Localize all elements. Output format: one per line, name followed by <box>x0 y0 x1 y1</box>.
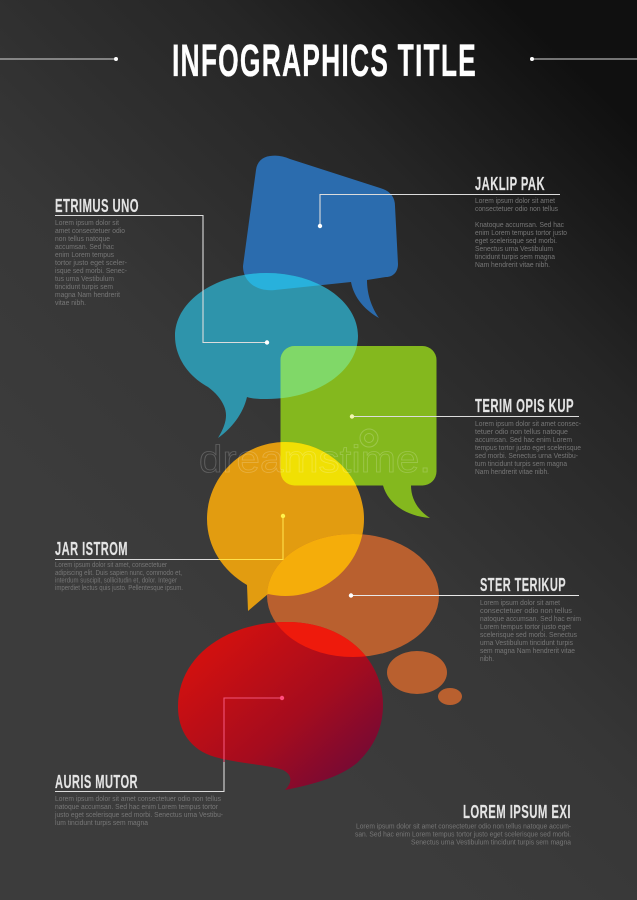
overlap: green and orange <box>280 442 356 486</box>
text: auris mutor: justo eget scelerisque sed morbi. Senectus urna Vestibu- <box>54 812 224 819</box>
connector: terim opis kup <box>350 414 579 419</box>
text: jaklip pak: tincidunt turpis sem magna <box>475 254 555 261</box>
text: etrimus uno: enim Lorem tempus <box>55 252 114 259</box>
bubble: green <box>280 346 436 518</box>
text: auris mutor: Lorem ipsum dolor sit amet consectetuer odio non tellus <box>55 796 221 803</box>
text: jar istrom: imperdiet lectus quis justo. Pellentesque ipsum. <box>55 585 183 592</box>
text: auris mutor <box>54 796 224 827</box>
heading: auris mutor: AURIS MUTOR <box>55 772 138 792</box>
text: lorem ipsum exi: Senectus urna Vestibulum tincidunt turpis sem magna <box>411 840 571 846</box>
text: lorem ipsum exi <box>355 824 572 846</box>
text: jar istrom: adipiscing elit. Duis sapien nunc, commodo et, <box>55 570 182 577</box>
connector: auris mutor <box>55 696 284 792</box>
text: terim opis kup <box>475 421 582 476</box>
text: jar istrom <box>55 562 183 592</box>
text: etrimus uno: tus urna Vestibulum <box>55 276 114 283</box>
text: etrimus uno: tincidunt turpis sem <box>55 284 113 291</box>
text: etrimus uno: Lorem ipsum dolor sit <box>55 220 119 227</box>
text: etrimus uno: accumsan. Sed hac <box>55 244 114 251</box>
text: jar istrom: interdum suscipit, sollicitudin et, dolor. Integer <box>55 578 178 584</box>
text: jaklip pak <box>475 198 567 269</box>
text: etrimus uno: isque sed morbi. Senec- <box>55 268 128 275</box>
heading: ster terikup: STER TERIKUP <box>480 575 566 595</box>
bubble: orange <box>207 442 364 611</box>
text: etrimus uno: tortor justo eget sceler- <box>55 260 128 267</box>
heading: jaklip pak: JAKLIP PAK <box>475 174 545 194</box>
text: ster terikup: sem magna Nam hendrerit vitae <box>480 648 575 655</box>
connector: jar istrom <box>55 514 285 560</box>
text: terim opis kup: tempus tortor justo eget scelerisque <box>475 445 581 452</box>
text: jaklip pak: Nam hendrerit vitae nibh. <box>475 262 550 269</box>
text: jaklip pak: Knatoque accumsan. Sed hac <box>475 222 564 229</box>
connector: etrimus uno <box>55 216 269 345</box>
bubble: blue <box>243 156 398 318</box>
text: ster terikup: consectetuer odio non tellus <box>480 608 573 615</box>
text: jaklip pak: enim Lorem tempus tortor justo <box>475 230 567 237</box>
watermark: dreamstime. <box>199 439 431 481</box>
text: terim opis kup: sed morbi. Senectus urna Vestibu- <box>475 453 579 460</box>
heading: lorem ipsum exi: LOREM IPSUM EXI <box>463 802 571 822</box>
text: ster terikup: Lorem ipsum dolor sit amet <box>480 600 560 607</box>
text: etrimus uno: magna Nam hendrerit <box>55 292 120 299</box>
text: terim opis kup: tum tincidunt turpis sem magna <box>475 461 567 468</box>
bubble: teal <box>175 273 358 438</box>
bubble: red <box>178 622 383 790</box>
text: etrimus uno: amet consectetuer odio <box>55 228 125 235</box>
overlap: orange and brown <box>267 534 362 596</box>
text: jaklip pak: eget scelerisque sed morbi. <box>475 238 557 245</box>
title rule right <box>530 57 637 61</box>
text: ster terikup: urna Vestibulum tincidunt turpis <box>480 640 573 647</box>
text: ster terikup <box>480 600 581 663</box>
text: lorem ipsum exi: san. Sed hac enim Lorem tempus tortor justo eget scelerisque sed morbi. <box>355 832 571 838</box>
text: terim opis kup: tetuer odio non tellus natoque <box>475 429 568 436</box>
heading: terim opis kup: TERIM OPIS KUP <box>475 396 574 416</box>
text: etrimus uno: non tellus natoque <box>55 236 110 243</box>
text: terim opis kup: accumsan. Sed hac enim Lorem <box>475 437 572 444</box>
heading: etrimus uno: ETRIMUS UNO <box>55 196 139 216</box>
text: etrimus uno <box>55 220 128 307</box>
thought bubble: brown <box>267 534 462 705</box>
text: ster terikup: natoque accumsan. Sed hac enim <box>480 616 581 623</box>
overlap: teal and green <box>280 346 357 398</box>
connector: ster terikup <box>349 593 579 598</box>
text: etrimus uno: vitae nibh. <box>55 300 86 307</box>
text: auris mutor: natoque accumsan. Sed hac enim Lorem tempus tortor <box>55 804 219 811</box>
text: jaklip pak: consectetuer odio non tellus <box>475 206 558 213</box>
text: ster terikup: scelerisque sed morbi. Senectus <box>480 632 577 639</box>
overlap: blue and teal <box>244 273 320 290</box>
connector: jaklip pak <box>318 194 560 228</box>
text: jaklip pak: Lorem ipsum dolor sit amet <box>475 198 555 205</box>
text: terim opis kup: Lorem ipsum dolor sit amet consec- <box>475 421 582 428</box>
text: jaklip pak: Senectus urna Vestibulum <box>475 246 553 253</box>
heading: jar istrom: JAR ISTROM <box>55 539 128 559</box>
text: ster terikup: nibh. <box>480 656 494 663</box>
text: terim opis kup: Nam hendrerit vitae nibh. <box>475 469 549 476</box>
title rule left <box>0 57 118 61</box>
overlap: brown and red <box>276 622 366 657</box>
text: ster terikup: Lorem tempus tortor justo eget <box>480 624 571 631</box>
text: jar istrom: Lorem ipsum dolor sit amet, consectetuer <box>55 562 168 569</box>
text: lorem ipsum exi: Lorem ipsum dolor sit amet consectetuer odio non tellus natoque accum- <box>356 824 572 830</box>
text: auris mutor: lum tincidunt turpis sem magna <box>55 820 148 827</box>
